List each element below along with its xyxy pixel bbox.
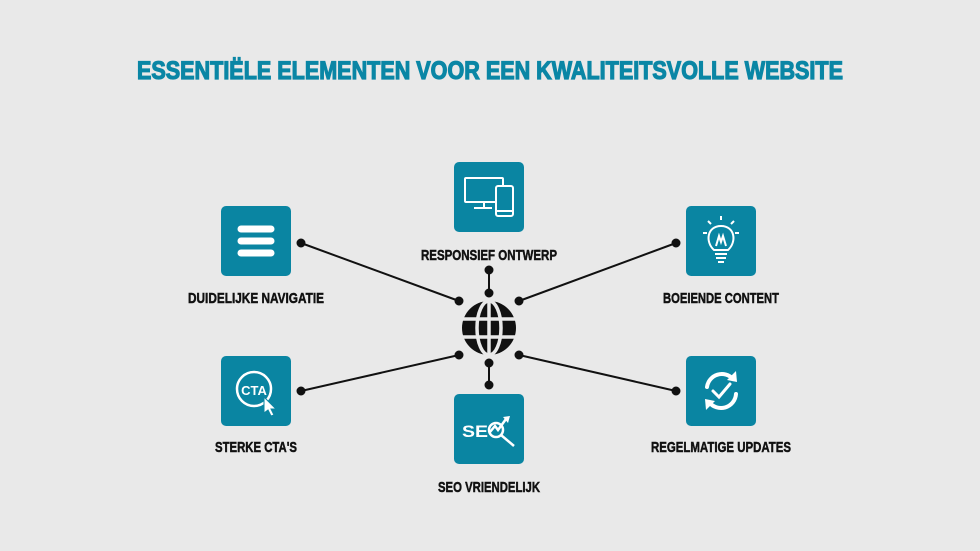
panel: boeiende content: BOEIENDE CONTENT	[663, 290, 779, 307]
panel: sterke cta's	[215, 356, 297, 456]
panel: sterke cta's: CTA	[241, 383, 267, 398]
panel: duidelijke navigatie: DUIDELIJKE NAVIGATIE	[188, 290, 324, 307]
panel: sterke cta's: STERKE CTA'S	[215, 439, 297, 456]
panel: responsief ontwerp	[421, 162, 557, 264]
panel: seo vriendelijk: SEO VRIENDELIJK	[438, 479, 540, 496]
panel: regelmatige updates	[651, 356, 791, 456]
panel: duidelijke navigatie	[188, 206, 324, 307]
panel: seo vriendelijk: SE	[462, 422, 488, 441]
connector lines	[298, 240, 680, 394]
panel: seo vriendelijk	[438, 394, 540, 496]
panel: boeiende content	[663, 206, 779, 307]
icon: globe	[462, 301, 516, 355]
panel: regelmatige updates: REGELMATIGE UPDATES	[651, 439, 791, 456]
title: ESSENTIËLE ELEMENTEN VOOR EEN KWALITEITSVOLLE WEBSITE	[137, 57, 843, 85]
panel: responsief ontwerp: RESPONSIEF ONTWERP	[421, 247, 557, 264]
